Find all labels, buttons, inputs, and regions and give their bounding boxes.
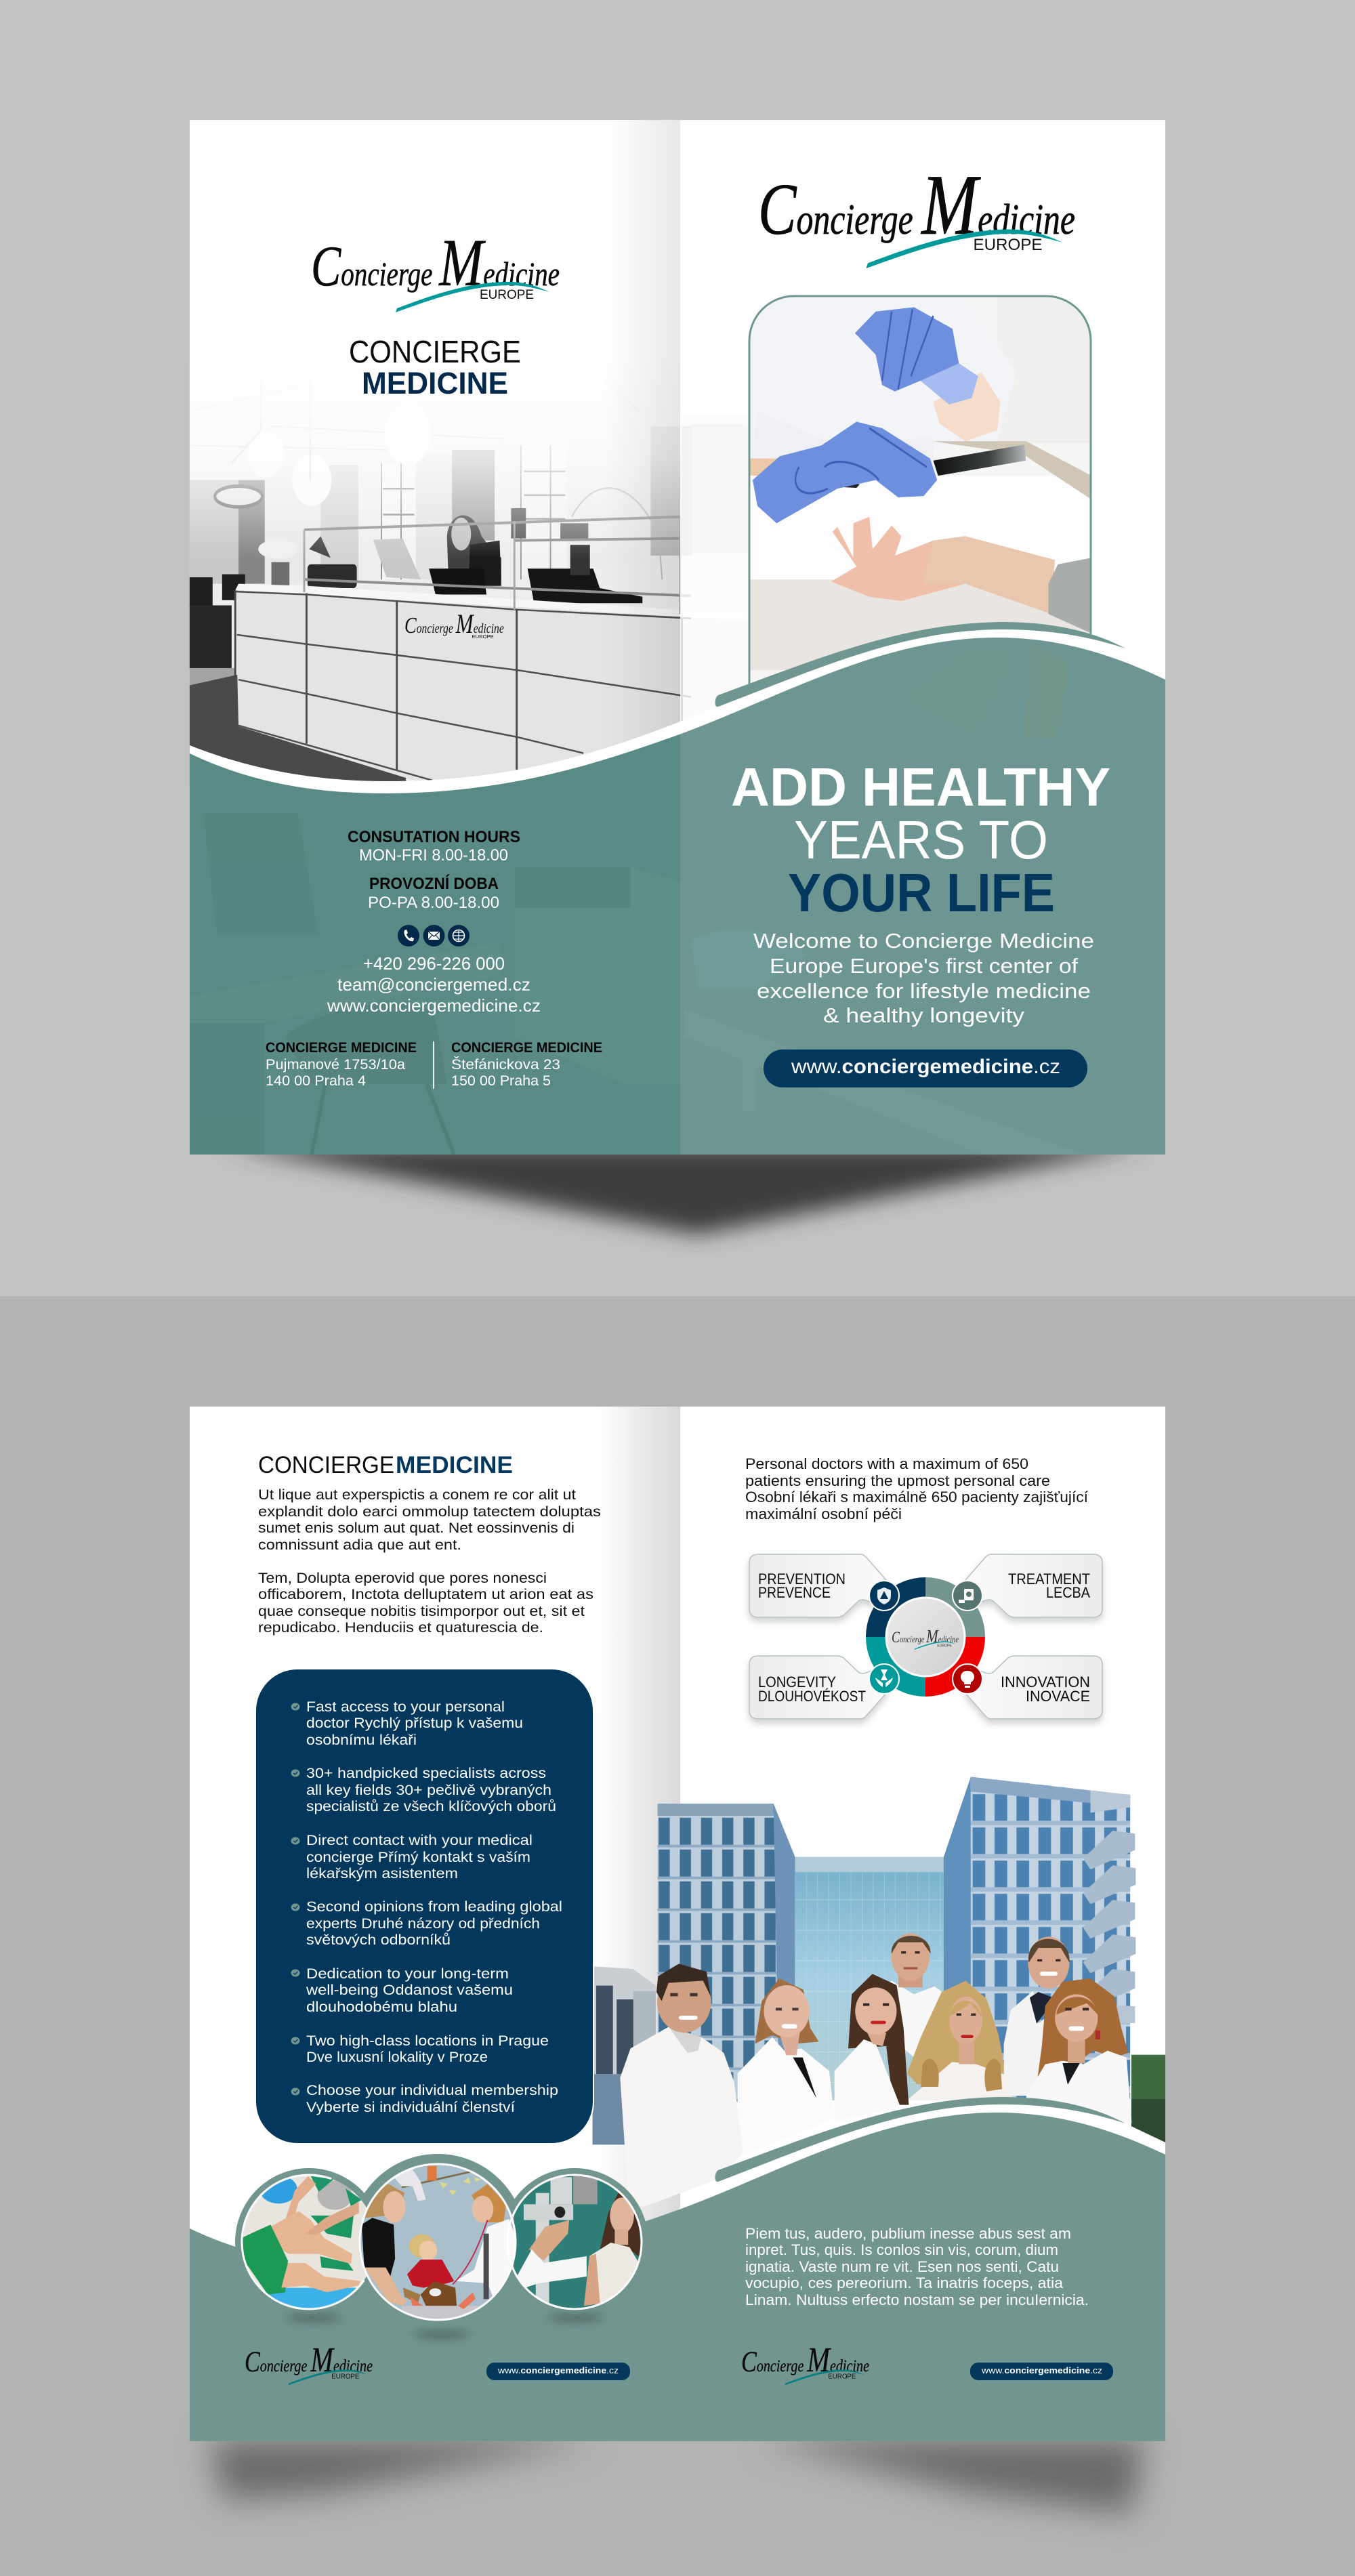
page background front bbox=[190, 120, 1165, 1155]
intro paragraph 1: Ut lique aut experspictis a conem re cor alit ut bbox=[258, 1487, 576, 1503]
logo: footer left: EUROPE bbox=[331, 2373, 360, 2380]
text: lorem paragraph: inpret. Tus, quis. Is conlos sin vis, corum, dium bbox=[745, 2241, 1058, 2258]
heading: concierge medicine bbox=[349, 334, 521, 400]
benefits text: Fast access to your personal bbox=[306, 1699, 505, 1715]
text: consultation hours: MON-FRI 8.00-18.00 bbox=[359, 846, 508, 865]
benefits text: experts Druhé názory od předních bbox=[306, 1916, 540, 1932]
text: personal doctors bbox=[745, 1455, 1088, 1522]
text: consultation hours bbox=[348, 828, 520, 912]
text: consultation hours: PROVOZNÍ DOBA bbox=[369, 874, 499, 893]
welcome text: Welcome to Concierge Medicine bbox=[753, 929, 1094, 953]
callout: treatment bbox=[965, 1554, 1102, 1617]
logo: footer left: Concierge Medicine bbox=[245, 2341, 373, 2380]
intro paragraph 1: explandit dolo earci ommolup tatectem doluptas bbox=[258, 1504, 601, 1520]
callout: longevity bbox=[749, 1656, 886, 1719]
background: upper grey bbox=[0, 0, 1355, 1296]
text: personal doctors: Osobní lékaři s maximálně 650 pacienty zajišťující bbox=[745, 1489, 1088, 1505]
panel: front spread bbox=[190, 120, 1165, 1155]
callout: treatment: TREATMENT bbox=[1008, 1571, 1090, 1587]
desk logo: EUROPE bbox=[472, 633, 494, 640]
benefits text: Two high-class locations in Prague bbox=[306, 2033, 549, 2049]
text: contact details: +420 296-226 000 bbox=[363, 953, 505, 974]
callout: innovation: INNOVATION bbox=[1001, 1674, 1090, 1690]
text: address Praha 5: CONCIERGE MEDICINE bbox=[451, 1040, 602, 1056]
callout: prevention: PREVENCE bbox=[758, 1584, 831, 1601]
ring chart bbox=[866, 1577, 985, 1697]
welcome text bbox=[753, 929, 1094, 1027]
callout: treatment: LECBA bbox=[1046, 1584, 1090, 1601]
benefits text: doctor Rychlý přístup k vašemu bbox=[306, 1716, 523, 1731]
shadow under front spread bbox=[224, 1145, 1145, 1234]
background: lower grey bbox=[0, 1296, 1355, 2576]
text: contact details bbox=[327, 953, 541, 1016]
person: man back right bbox=[1004, 1936, 1070, 2096]
welcome text: excellence for lifestyle medicine bbox=[757, 979, 1091, 1003]
hub logo: EUROPE bbox=[937, 1644, 952, 1648]
callout: innovation bbox=[965, 1656, 1102, 1719]
faint gym photo in right teal panel bbox=[684, 644, 1084, 1155]
heading back bbox=[258, 1452, 513, 1478]
text: lorem paragraph bbox=[745, 2225, 1089, 2308]
heading: concierge medicine: MEDICINE bbox=[362, 366, 508, 400]
text: address Praha 4: 140 00 Praha 4 bbox=[266, 1073, 366, 1089]
icon: medical kit bbox=[953, 1581, 982, 1611]
headline: YOUR LIFE bbox=[788, 863, 1055, 923]
icon: light bulb bbox=[953, 1664, 982, 1694]
text: address Praha 4 bbox=[266, 1040, 417, 1089]
teal swoosh back bbox=[715, 2097, 1125, 2182]
heading back: MEDICINE bbox=[396, 1452, 513, 1478]
benefits text: all key fields 30+ pečlivě vybraných bbox=[306, 1783, 551, 1798]
headline bbox=[731, 757, 1110, 923]
faint office photo in left teal panel bbox=[310, 1083, 455, 1155]
benefits text: Second opinions from leading global bbox=[306, 1899, 562, 1915]
benefits text: Vyberte si individuální členství bbox=[306, 2100, 515, 2115]
logo: front right: Concierge Medicine bbox=[758, 157, 1075, 253]
white fade over top of reception photo bbox=[190, 356, 682, 559]
text: contact details: team@conciergemed.cz bbox=[337, 974, 530, 995]
benefits text: světových odborníků bbox=[306, 1932, 451, 1948]
fold shading bbox=[603, 120, 680, 770]
welcome text: Europe Europe's first center of bbox=[770, 954, 1078, 978]
teal panel right bbox=[680, 638, 1165, 1155]
desk logo: Concierge Medicine bbox=[404, 608, 504, 639]
shadow under back spread bbox=[210, 2439, 1145, 2514]
panel: benefits list bbox=[255, 1669, 593, 2144]
text: lorem paragraph: ignatia. Vaste num re vit. Esen nos senti, Catu bbox=[745, 2258, 1059, 2275]
logo: front left: Concierge Medicine bbox=[311, 225, 560, 300]
benefits text: well-being Oddanost vašemu bbox=[306, 1982, 513, 1998]
benefits text: 30+ handpicked specialists across bbox=[306, 1766, 546, 1781]
text: lorem paragraph: Linam. Nultuss erfecto nostam se per incuIernicia. bbox=[745, 2291, 1089, 2308]
photo card border bbox=[749, 296, 1091, 811]
white band under photos bbox=[190, 622, 1165, 881]
person: woman left bbox=[737, 1978, 833, 2102]
text: personal doctors: Personal doctors with a maximum of 650 bbox=[745, 1455, 1028, 1472]
text: consultation hours: CONSUTATION HOURS bbox=[348, 828, 520, 846]
logo: footer right: EUROPE bbox=[828, 2373, 856, 2380]
white band back bbox=[678, 2097, 1165, 2236]
intro paragraph 1: sumet enis solum aut quat. Net eossinvenis di bbox=[258, 1520, 575, 1536]
person: man front bbox=[620, 1964, 743, 2207]
intro paragraph 2 bbox=[258, 1571, 593, 1636]
callout: prevention: PREVENTION bbox=[758, 1571, 846, 1587]
welcome text: & healthy longevity bbox=[823, 1003, 1025, 1027]
text: lorem paragraph: Piem tus, audero, publium inesse abus sest am bbox=[745, 2225, 1071, 2242]
photo: building and team bbox=[593, 1777, 1165, 2207]
text: personal doctors: maximální osobní péči bbox=[745, 1505, 902, 1522]
benefits text: Choose your individual membership bbox=[306, 2083, 558, 2098]
team group bbox=[620, 1933, 1131, 2207]
logo: front left: EUROPE bbox=[480, 288, 534, 302]
photo circles backing bbox=[235, 2154, 648, 2330]
heading: concierge medicine: CONCIERGE bbox=[349, 334, 521, 369]
benefits text: lékařským asistentem bbox=[306, 1866, 458, 1882]
benefits text: Direct contact with your medical bbox=[306, 1833, 533, 1848]
intro paragraph 2: officaborem, Inctota delluptatem ut arion eat as bbox=[258, 1587, 593, 1602]
website pill: footer left: www.conciergemedicine .cz bbox=[497, 2365, 619, 2375]
bullet markers bbox=[291, 1703, 299, 2095]
shadows under circles bbox=[285, 2314, 604, 2338]
white top of right page above reception tail bbox=[680, 120, 749, 415]
text: address Praha 5: Štefánickova 23 bbox=[451, 1057, 560, 1073]
text: contact details: www.conciergemedicine.cz bbox=[327, 995, 541, 1016]
intro paragraph 2: quae conseque nobitis tisimporpor out et, sit et bbox=[258, 1604, 585, 1619]
website pill: footer right bbox=[970, 2363, 1113, 2380]
benefits text: concierge Přímý kontakt s vaším bbox=[306, 1850, 530, 1865]
text: consultation hours: PO-PA 8.00-18.00 bbox=[368, 894, 499, 912]
photo card: gloved hands with magnifier bbox=[751, 297, 1089, 683]
website pill: footer left bbox=[486, 2363, 630, 2380]
person: woman blonde bbox=[907, 1980, 1012, 2100]
headline: YEARS TO bbox=[794, 810, 1048, 870]
circle white rings bbox=[242, 2164, 642, 2320]
photo: eye exam bbox=[514, 2173, 646, 2312]
logo: footer right: Concierge Medicine bbox=[741, 2341, 869, 2380]
callout: prevention bbox=[749, 1554, 886, 1617]
text: lorem paragraph: vocupio, ces pereorium. Ta inatris foceps, atia bbox=[745, 2274, 1064, 2291]
logo: front right: EUROPE bbox=[973, 236, 1042, 254]
heading back: CONCIERGE bbox=[258, 1452, 394, 1478]
white fade over reception tail on right page bbox=[680, 120, 749, 797]
intro paragraph 1: comnissunt adia que aut ent. bbox=[258, 1537, 461, 1553]
hub logo: Concierge Medicine bbox=[892, 1626, 959, 1646]
person: woman right bbox=[1026, 1978, 1131, 2123]
callout: longevity: LONGEVITY bbox=[758, 1674, 836, 1690]
fold shading back bbox=[596, 1407, 680, 2287]
photo: physiotherapy bbox=[238, 2173, 367, 2312]
intro paragraph 1 bbox=[258, 1487, 601, 1553]
intro paragraph 2: Tem, Dolupta eperovid que pores nonesci bbox=[258, 1571, 547, 1586]
benefits text: Dve luxusní lokality v Proze bbox=[306, 2050, 488, 2065]
teal panel left bbox=[190, 734, 680, 1155]
website pill bbox=[764, 1050, 1087, 1087]
icons: phone, mail, web bbox=[398, 925, 470, 947]
teal panel back bbox=[190, 2113, 1165, 2441]
person: man back centre bbox=[848, 1933, 943, 2058]
photo: reception desk bbox=[190, 359, 748, 786]
text: address Praha 5: 150 00 Praha 5 bbox=[451, 1073, 551, 1089]
website pill: www.conciergemedicine .cz bbox=[791, 1056, 1060, 1078]
teal swoosh bbox=[715, 622, 1125, 707]
intro paragraph 2: repudicabo. Henduciis et quaturescia de. bbox=[258, 1620, 543, 1636]
icon: shield bbox=[869, 1581, 899, 1611]
benefits text: Dedication to your long-term bbox=[306, 1966, 509, 1982]
text: personal doctors: patients ensuring the upmost personal care bbox=[745, 1472, 1050, 1489]
benefits text: osobnímu lékaři bbox=[306, 1732, 417, 1748]
benefits text: dlouhodobému blahu bbox=[306, 1999, 457, 2015]
benefits text: specialistů ze všech klíčových oborů bbox=[306, 1799, 556, 1814]
panel: back spread bbox=[190, 1407, 1165, 2441]
icon: hourglass in hands bbox=[869, 1664, 899, 1694]
website pill: footer right: www.conciergemedicine .cz bbox=[981, 2365, 1102, 2375]
diagram: four pillars bbox=[749, 1554, 1102, 1719]
text: address Praha 4: Pujmanové 1753/10a bbox=[266, 1057, 405, 1073]
callout: longevity: DLOUHOVÉKOST bbox=[758, 1688, 866, 1705]
headline: ADD HEALTHY bbox=[731, 757, 1110, 817]
text: address Praha 5 bbox=[451, 1040, 602, 1089]
person: woman centre bbox=[835, 1974, 909, 2105]
photo: paediatric exam bbox=[360, 2165, 515, 2319]
page background back bbox=[190, 1407, 1165, 2441]
text: address Praha 4: CONCIERGE MEDICINE bbox=[266, 1040, 417, 1056]
benefits text bbox=[306, 1699, 562, 2115]
callout: innovation: INOVACE bbox=[1026, 1688, 1090, 1705]
